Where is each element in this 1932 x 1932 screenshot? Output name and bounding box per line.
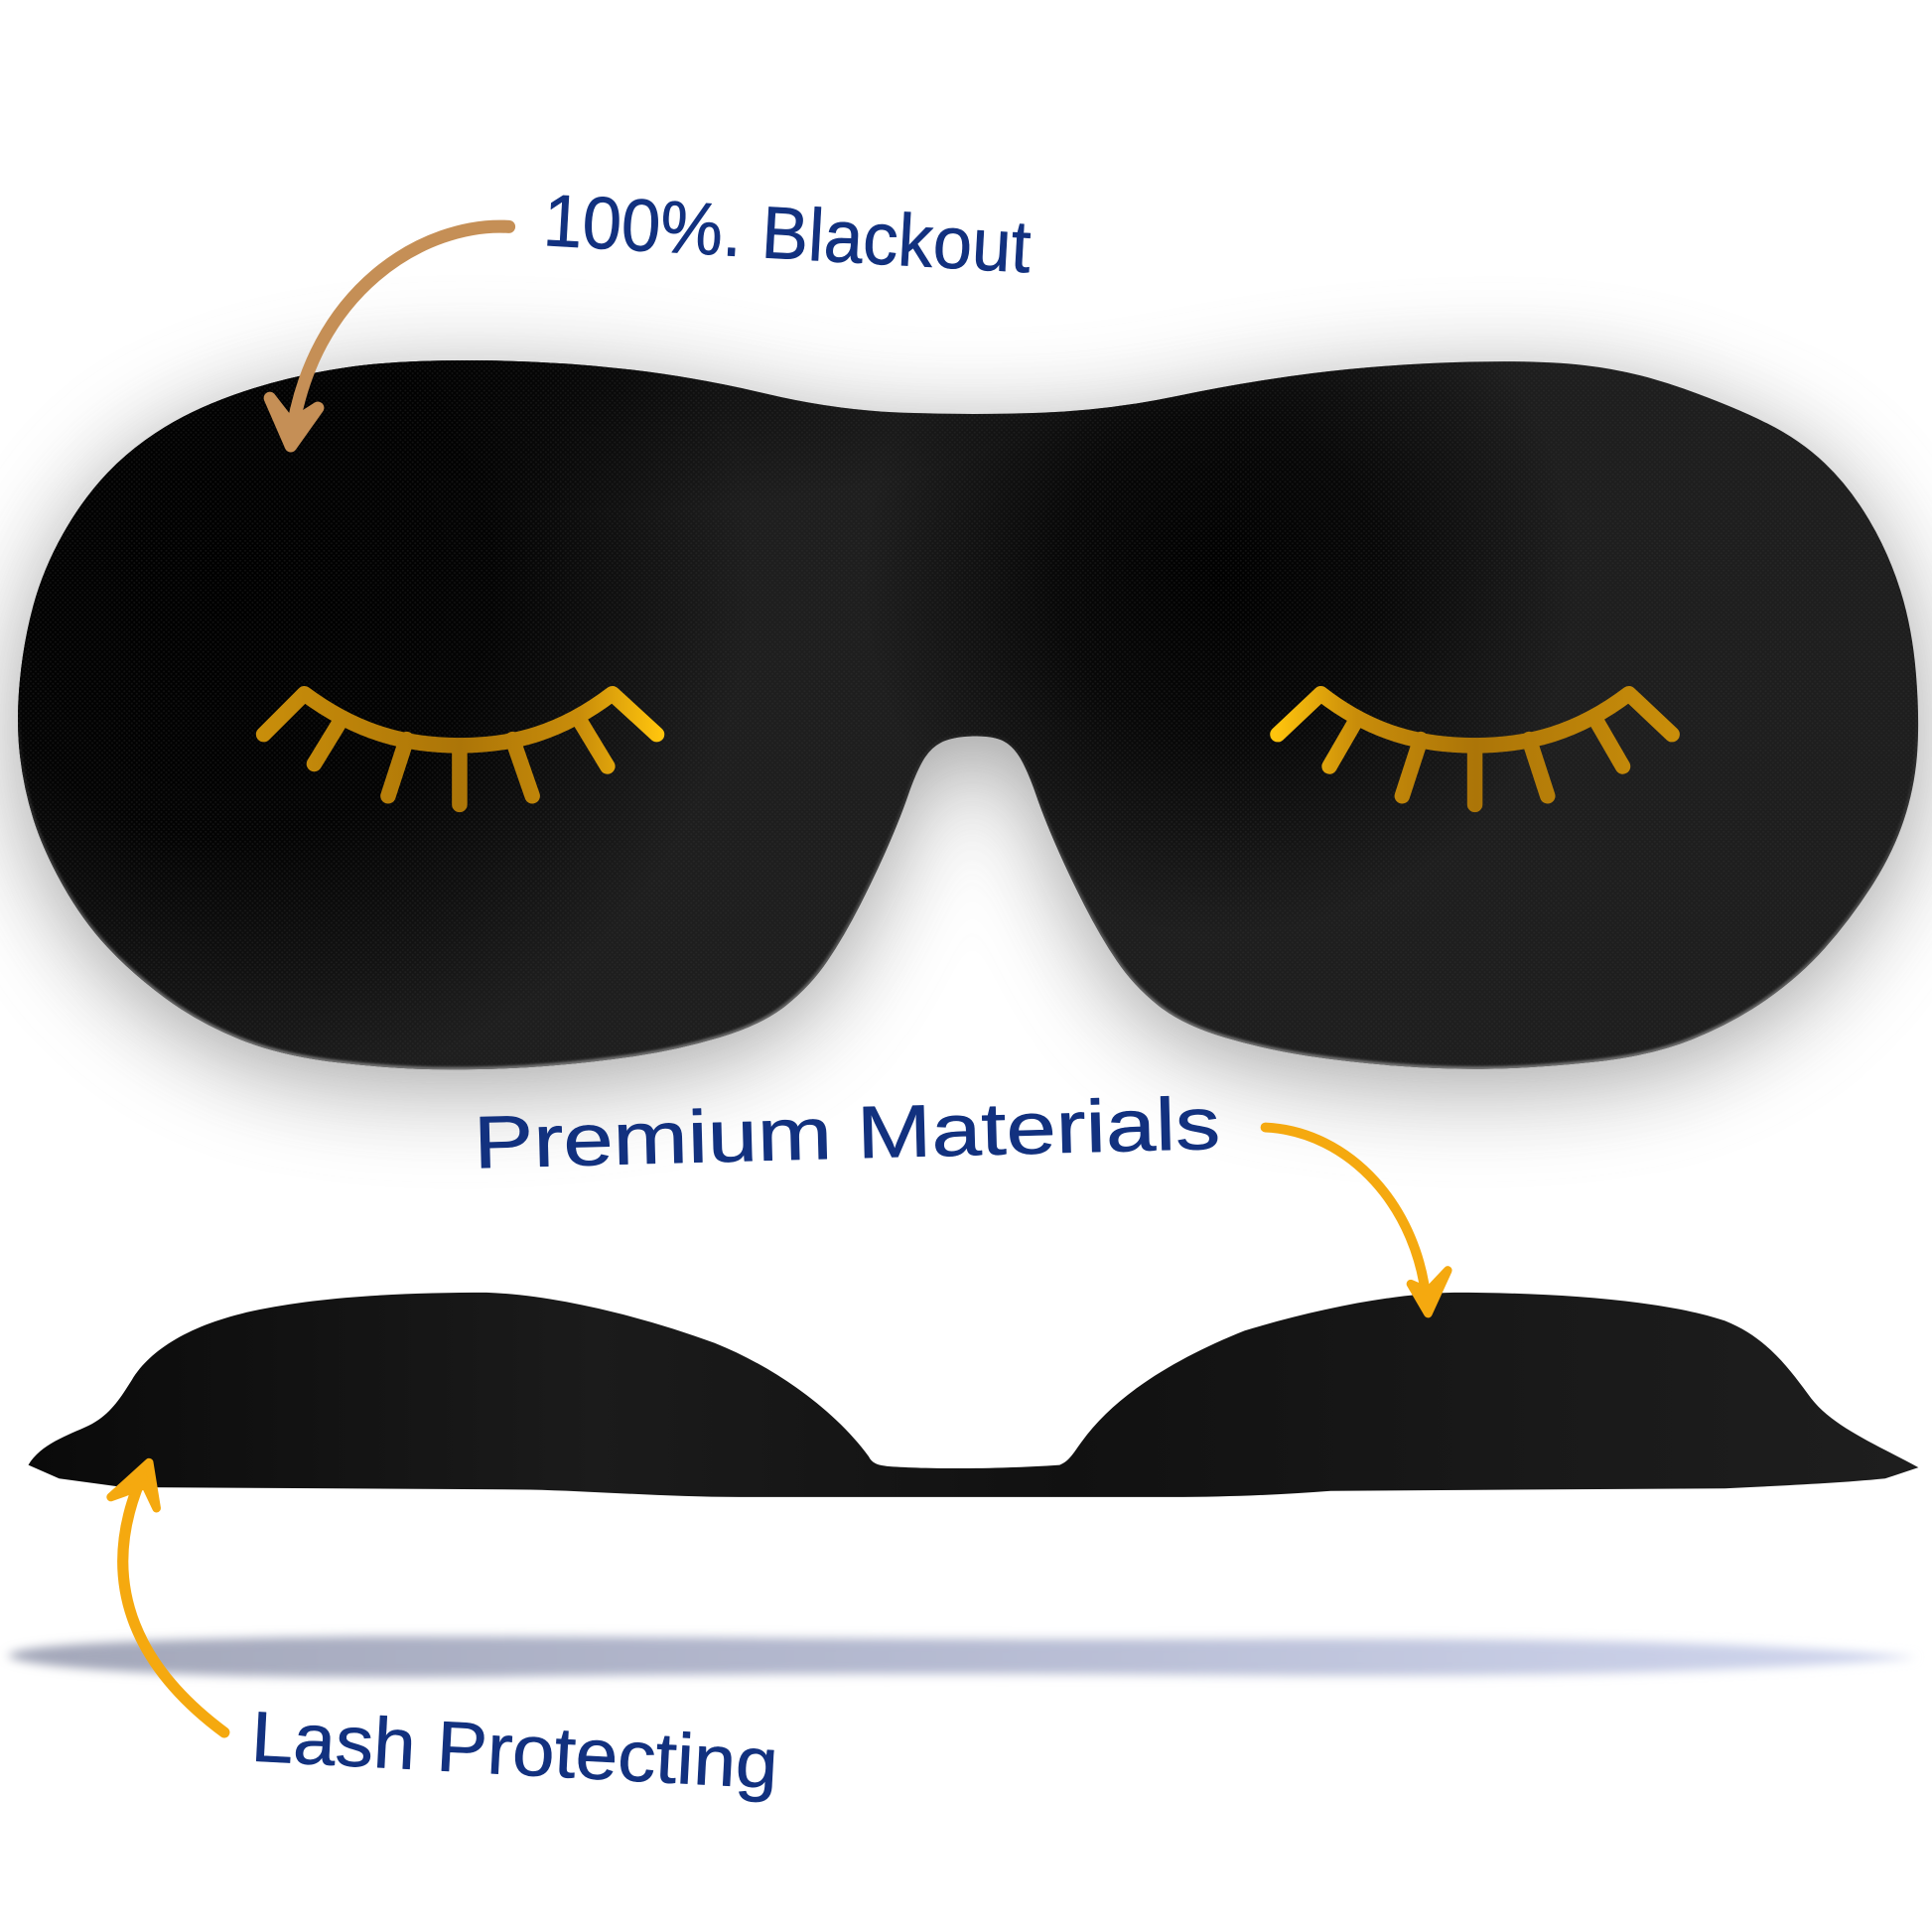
side view sleep mask [29,1293,1918,1497]
icon: left closed eye with lashes [264,694,656,804]
arrow: lash protecting [111,1462,224,1732]
label: Lash Protecting: Lash Protecting [249,1698,780,1804]
arrow: premium materials [1266,1128,1448,1313]
label: 100% Blackout: 100%. Blackout [541,179,1034,288]
label: Premium Materials: Premium Materials [473,1082,1221,1184]
front view sleep mask [0,345,1932,1084]
arrow: 100% blackout [270,226,509,446]
icon: right closed eye with lashes [1278,694,1672,804]
mask soft drop shadow [18,377,1918,1087]
mask shading and eye cups [0,345,1932,1084]
ground shadow [7,1636,1917,1678]
